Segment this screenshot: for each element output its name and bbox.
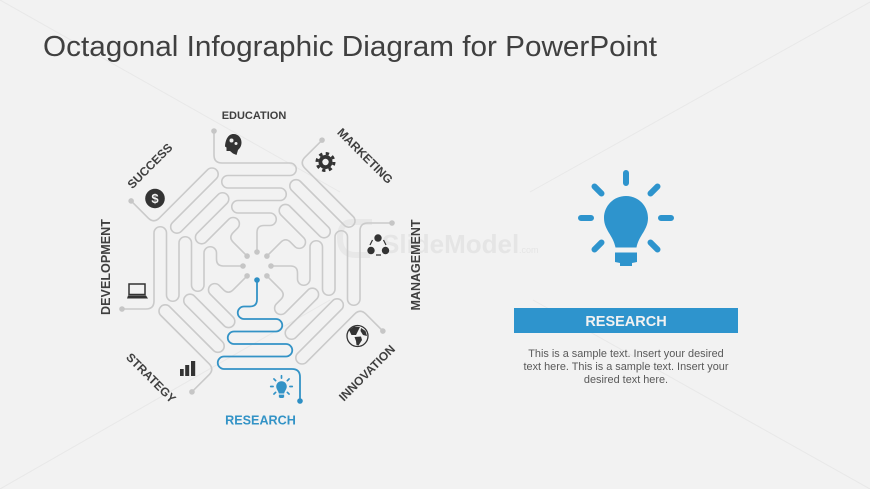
maze path: development (119, 227, 246, 312)
icon: head with gears (225, 134, 242, 155)
maze path: management (268, 220, 395, 305)
label: innovation: INNOVATION (336, 342, 398, 404)
label: marketing: MARKETING (334, 125, 396, 187)
icon: dollar coin: $ (151, 191, 159, 206)
icon: network (367, 234, 389, 255)
detail text block (524, 348, 729, 386)
watermark: SlideModel (382, 229, 519, 259)
icon: laptop (127, 284, 148, 298)
icon: bar chart (180, 361, 195, 376)
maze path: success (127, 141, 277, 290)
label: strategy: STRATEGY (123, 350, 179, 406)
icon: dollar coin (145, 189, 165, 208)
maze path: education (211, 128, 296, 255)
icon: large light bulb (581, 173, 671, 266)
detail text block: desired text here. (584, 374, 668, 386)
detail text block: This is a sample text. Insert your desired (528, 348, 724, 360)
label: success: SUCCESS (125, 141, 175, 191)
octagonal maze diagram (119, 128, 395, 404)
label: education: EDUCATION (222, 110, 286, 122)
label: management: MANAGEMENT (409, 219, 423, 310)
icon: small research bulb (271, 376, 292, 398)
detail text block: text here. This is a sample text. Insert your (524, 361, 729, 373)
detail heading bar: RESEARCH (585, 314, 667, 330)
watermark (340, 222, 539, 259)
watermark: .com (519, 245, 539, 255)
detail heading bar (514, 308, 738, 333)
maze path: research (highlighted) (218, 277, 303, 404)
icon: globe (347, 326, 368, 346)
icon: gear (317, 154, 334, 170)
maze path: innovation (237, 242, 387, 391)
maze path: strategy (132, 246, 281, 396)
label: research: RESEARCH (225, 414, 296, 428)
label: development: DEVELOPMENT (99, 219, 113, 315)
title: Octagonal Infographic Diagram for PowerPoint (43, 31, 657, 63)
maze path: marketing (233, 136, 382, 286)
